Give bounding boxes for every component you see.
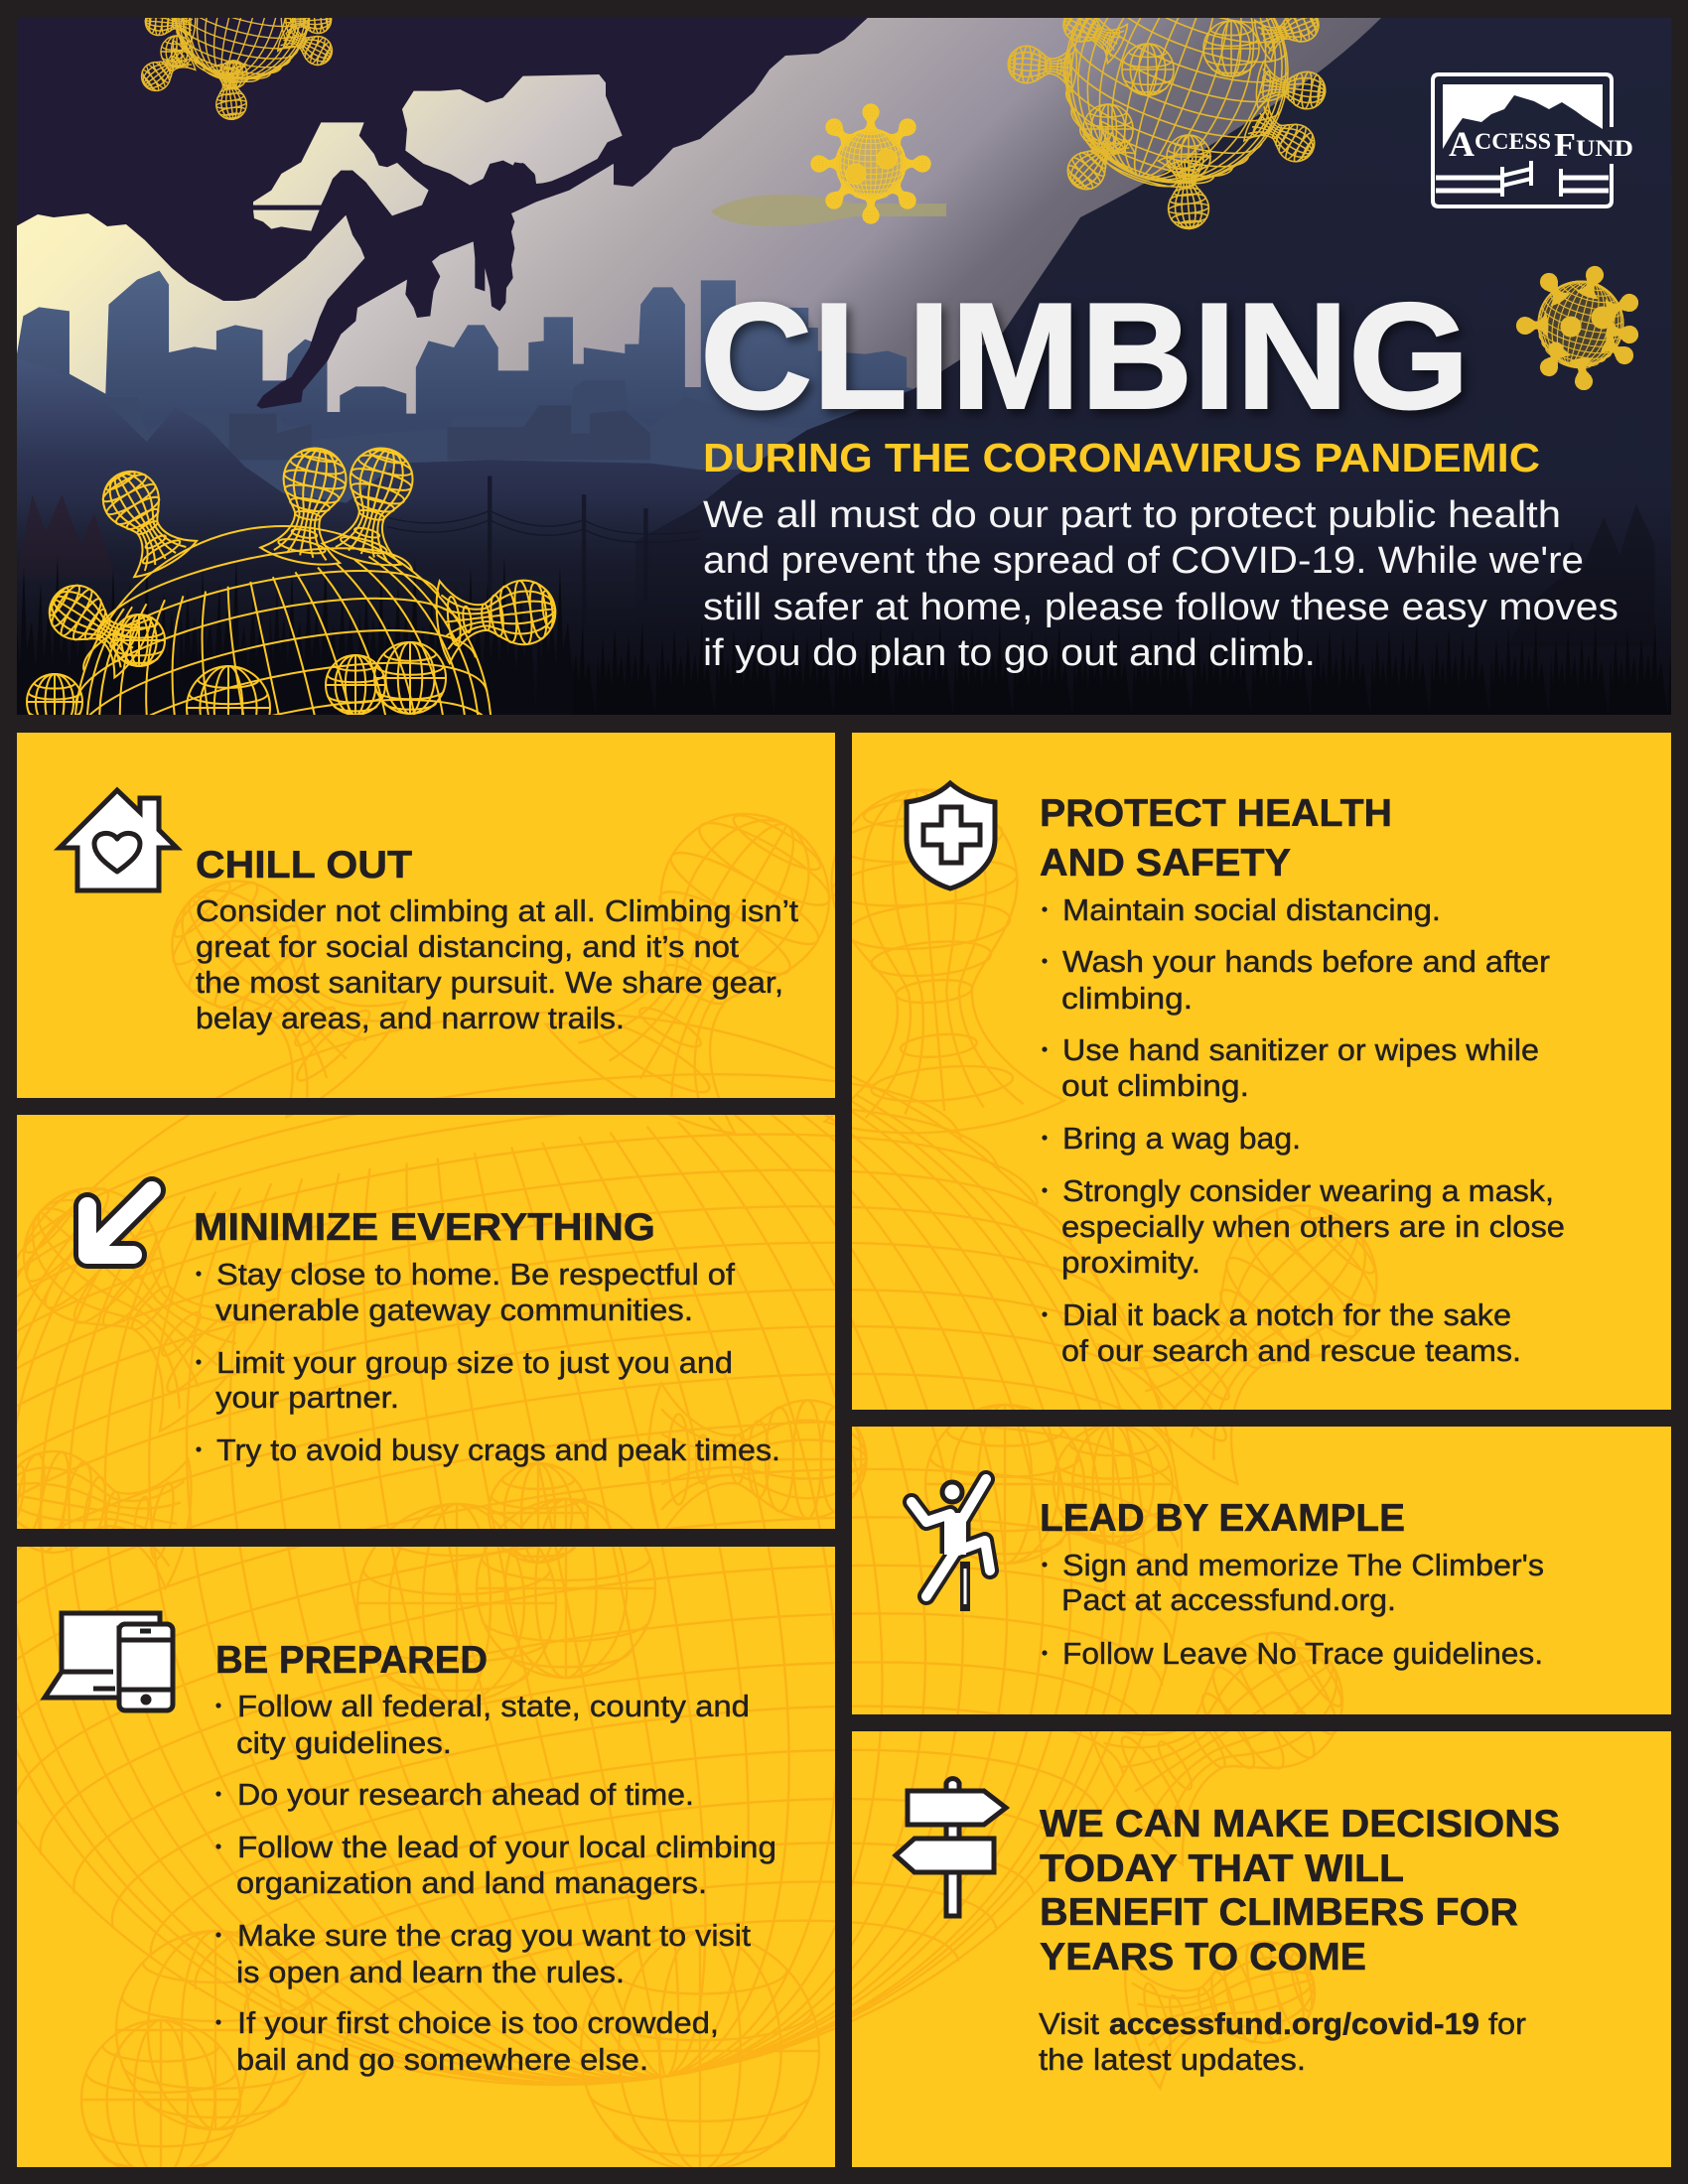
logo: Access Fund: F: [1554, 127, 1576, 164]
virus: small right: [1516, 263, 1641, 391]
bullet list: Make sure the crag you want to visit: [237, 1919, 752, 1953]
bullet list: is open and learn the rules.: [236, 1956, 625, 1989]
virus: small centre: [811, 104, 930, 223]
heading: CHILL OUT: [196, 844, 412, 887]
subtitle: DURING THE CORONAVIRUS PANDEMIC: [703, 435, 1540, 480]
virus: big top right: [1007, 0, 1329, 231]
call to action text: [1039, 2007, 1526, 2077]
bullet list: [196, 1258, 780, 1467]
intro paragraph: still safer at home, please follow these easy moves: [703, 587, 1618, 628]
heading: AND SAFETY: [1040, 842, 1291, 885]
body text: great for social distancing, and it’s not: [196, 930, 740, 964]
icon: climber figure: [912, 1479, 990, 1611]
call to action text: for: [1488, 2007, 1526, 2041]
bullet list: Use hand sanitizer or wipes while: [1062, 1033, 1539, 1067]
body text: the most sanitary pursuit. We share gear,: [196, 966, 783, 1000]
heading: YEARS TO COME: [1040, 1936, 1366, 1979]
bullet list: organization and land managers.: [236, 1866, 707, 1900]
panel: be prepared: [17, 1547, 835, 2167]
bullet list: [215, 1690, 776, 2077]
bullet list: Maintain social distancing.: [1062, 893, 1441, 927]
body text: [196, 894, 799, 1035]
rock overhang: [16, 14, 872, 301]
bullet list: climbing.: [1061, 982, 1193, 1016]
panel: hero banner: [17, 18, 1671, 715]
intro paragraph: and prevent the spread of COVID-19. While we're: [703, 540, 1584, 582]
bullet list: vunerable gateway communities.: [215, 1294, 693, 1327]
city skyline: [17, 271, 967, 546]
bullet list: [1042, 893, 1565, 1368]
title: CLIMBING: [700, 272, 1470, 441]
trees and power poles: [16, 476, 1655, 647]
bullet list: If your first choice is too crowded,: [237, 2006, 719, 2040]
bullet list: Dial it back a notch for the sake: [1062, 1298, 1511, 1332]
virus: large bottom left: [27, 439, 560, 982]
call to action text: the latest updates.: [1039, 2043, 1306, 2077]
panel: minimize everything: [17, 1115, 835, 1529]
virus: top left: [133, 0, 339, 122]
heading: [1040, 792, 1392, 885]
bullet list: Follow all federal, state, county and: [237, 1690, 750, 1723]
bullet list: your partner.: [215, 1381, 399, 1415]
intro paragraph: We all must do our part to protect public health: [703, 494, 1561, 536]
heading: PROTECT HEALTH: [1040, 792, 1392, 835]
panel: chill out: [17, 733, 835, 1098]
grass silhouettes: [17, 546, 1671, 715]
icon: laptop and phone: [45, 1613, 173, 1710]
logo: Access Fund: UND: [1576, 136, 1633, 161]
icon: signpost: [896, 1779, 1006, 1916]
heading: LEAD BY EXAMPLE: [1040, 1497, 1405, 1540]
bullet list: of our search and rescue teams.: [1061, 1334, 1521, 1368]
bullet list: Sign and memorize The Climber's: [1062, 1549, 1544, 1582]
body text: belay areas, and narrow trails.: [196, 1002, 625, 1035]
climber silhouette: [256, 152, 614, 409]
logo: Access Fund: [1433, 74, 1633, 206]
heading: TODAY THAT WILL: [1040, 1847, 1404, 1890]
panel: we can make decisions: [852, 1731, 1671, 2167]
bullet list: [1042, 1549, 1544, 1671]
bullet list: Limit your group size to just you and: [216, 1346, 733, 1380]
bullet list: Stay close to home. Be respectful of: [216, 1258, 736, 1292]
heading: WE CAN MAKE DECISIONS: [1040, 1803, 1560, 1845]
bullet list: Pact at accessfund.org.: [1061, 1583, 1396, 1617]
panel: protect health and safety: [852, 733, 1671, 1410]
heading: BE PREPARED: [215, 1639, 488, 1682]
bullet list: Do your research ahead of time.: [237, 1778, 694, 1812]
bullet list: Strongly consider wearing a mask,: [1062, 1174, 1554, 1208]
bullet list: Follow Leave No Trace guidelines.: [1062, 1637, 1543, 1671]
mountains and ground: [17, 359, 1010, 715]
bullet list: bail and go somewhere else.: [236, 2043, 648, 2077]
body text: Consider not climbing at all. Climbing isn’t: [196, 894, 799, 928]
logo: Access Fund: CCESS: [1475, 129, 1551, 154]
heading: BENEFIT CLIMBERS FOR: [1040, 1891, 1518, 1934]
logo: Access Fund: A: [1449, 124, 1475, 164]
bottom fade to black: [17, 496, 1671, 715]
bullet list: Follow the lead of your local climbing: [237, 1831, 776, 1864]
icon: shield with cross: [907, 783, 995, 888]
smudge cloud: [711, 195, 946, 226]
bullet list: proximity.: [1061, 1246, 1200, 1280]
openings in the rock: [253, 74, 623, 231]
intro paragraph: [703, 494, 1618, 674]
bullet list: out climbing.: [1061, 1069, 1249, 1103]
bullet list: Bring a wag bag.: [1062, 1122, 1301, 1156]
icon: arrow pointing down-left: [87, 1190, 152, 1255]
bullet list: Wash your hands before and after: [1062, 945, 1550, 979]
bullet list: especially when others are in close: [1061, 1210, 1565, 1244]
intro paragraph: if you do plan to go out and climb.: [703, 632, 1316, 674]
heading: MINIMIZE EVERYTHING: [194, 1206, 655, 1249]
dark slope on right: [635, 17, 1671, 715]
bullet list: city guidelines.: [236, 1726, 452, 1760]
bullet list: Try to avoid busy crags and peak times.: [216, 1433, 780, 1467]
call to action text: Visit: [1039, 2007, 1100, 2041]
heading: [1040, 1803, 1560, 1979]
panel: lead by example: [852, 1427, 1671, 1714]
icon: house with heart: [60, 790, 177, 890]
call to action text: accessfund.org/covid-19: [1109, 2007, 1479, 2041]
